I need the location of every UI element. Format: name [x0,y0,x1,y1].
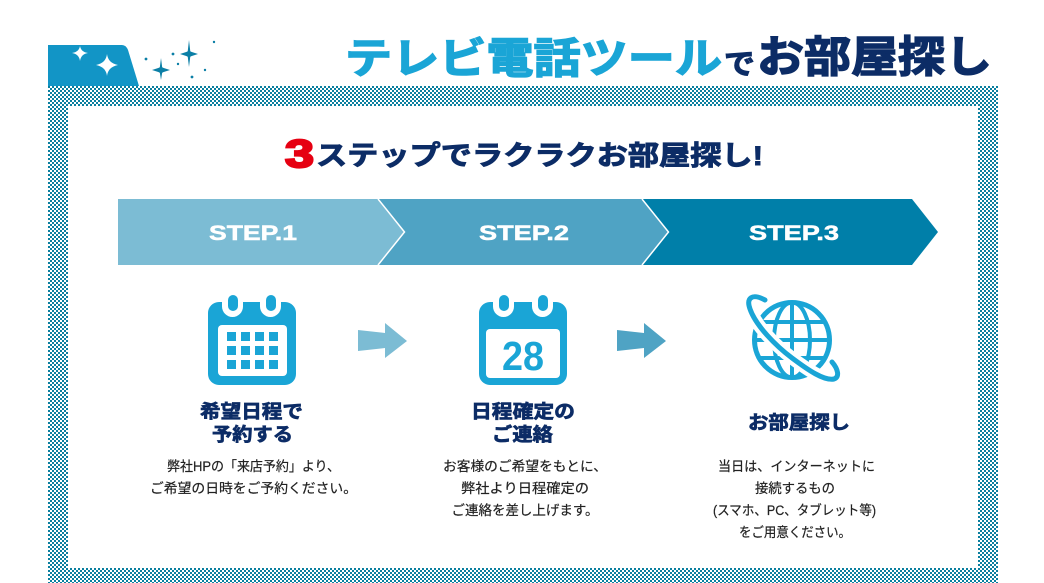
title: テレビ電話ツール [345,35,722,82]
column 3 description: 接続するもの [755,480,835,496]
decorative star cluster [145,40,215,80]
icon: calendar 28: 28 [502,333,544,379]
column 1 description: 弊社HPの「来店予約」より、 [167,459,340,474]
heading: 3 steps: ステップでラクラクお部屋探し! [316,141,763,171]
icon: globe [749,297,838,379]
column 3 description: 当日は、インターネットに [718,459,875,474]
column 1 description [150,459,357,496]
corner tab with sparkles [48,45,139,86]
step banner [118,199,938,265]
checkered frame panel [48,86,998,583]
column 1 heading [200,401,303,445]
column 1 heading: 希望日程で [200,401,303,422]
title [345,34,992,82]
column 1 heading: 予約する [212,424,293,445]
column 2 description: 弊社より日程確定の [461,481,589,496]
column 3 description: をご用意ください。 [739,525,851,540]
step labels: STEP.1 [209,222,297,245]
column 2 heading: ご連絡 [492,424,554,445]
column 2 heading: 日程確定の [471,401,575,422]
step labels: STEP.2 [479,222,569,245]
column 1 description: ご希望の日時をご予約ください。 [150,481,357,496]
column 3 heading: お部屋探し [748,412,850,433]
icon: calendar grid [208,290,296,385]
column 2 description: お客様のご希望をもとに、 [443,458,607,474]
column 2 heading [471,401,575,445]
column 2 description: ご連絡を差し上げます。 [452,503,598,518]
column 1 [150,401,357,496]
arrow 1 [358,323,407,358]
step 2 chevron [376,199,668,265]
column 2 description [443,458,607,518]
step labels [209,222,839,245]
column 3 description: (スマホ、PC、タブレット等) [713,502,876,518]
arrow 2 [617,323,666,358]
column 3 description [713,459,876,540]
title: で [724,49,755,81]
heading: 3 steps [285,133,763,176]
step labels: STEP.3 [749,222,839,245]
icon: calendar 28 [479,290,567,385]
title: お部屋探し [757,34,992,82]
heading: 3 steps: 3 [285,133,314,176]
column 3 [713,412,876,540]
step 3 chevron [640,199,938,265]
chevron separators [378,199,668,265]
column 2 [443,401,607,518]
step 1 chevron [118,199,404,265]
